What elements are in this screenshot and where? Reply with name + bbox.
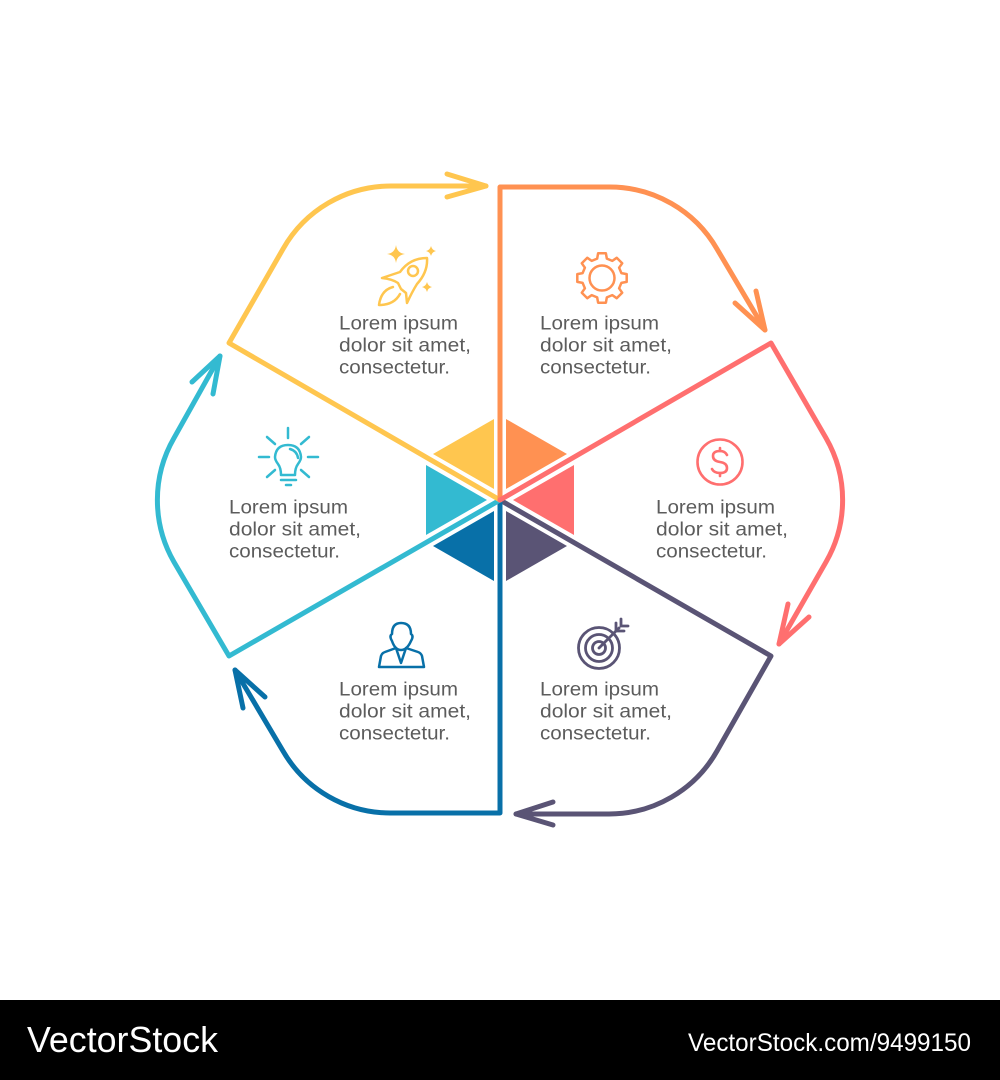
text block: right: dolor sit amet,	[656, 518, 788, 540]
central hexagon	[426, 419, 574, 581]
outline: yellow segment with arrow	[229, 174, 500, 500]
text block: top right: consectetur.	[540, 356, 651, 378]
footer url text: VectorStock.com/9499150	[688, 1029, 971, 1057]
hexagon segment: orange	[506, 419, 567, 489]
icon: person	[379, 623, 424, 667]
outline: coral segment with arrow	[500, 343, 843, 644]
hexagon segment: coral	[513, 465, 574, 535]
footer bar	[0, 1000, 1000, 1080]
hexagon segment: purple	[506, 511, 567, 581]
icon: gear	[577, 253, 627, 303]
icon: rocket	[379, 245, 436, 305]
text block: bottom left: dolor sit amet,	[339, 700, 471, 722]
text block: top left: consectetur.	[339, 356, 450, 378]
icon: light bulb	[259, 428, 318, 485]
text block: bottom right: consectetur.	[540, 722, 651, 744]
text block: bottom left: Lorem ipsum	[339, 678, 458, 700]
outline: orange segment with arrow	[500, 187, 765, 500]
hexagon segment: cyan	[426, 465, 487, 535]
text block: bottom left	[339, 678, 471, 744]
text block: left	[229, 496, 361, 562]
text block: right	[656, 496, 788, 562]
outline: blue segment with arrow	[235, 500, 500, 813]
icon: dollar coin	[698, 440, 742, 484]
text block: bottom right: Lorem ipsum	[540, 678, 659, 700]
text block: left: consectetur.	[229, 540, 340, 562]
text block: right: Lorem ipsum	[656, 496, 775, 518]
text block: bottom right: dolor sit amet,	[540, 700, 672, 722]
text block: top left: Lorem ipsum	[339, 312, 458, 334]
text block: top left: dolor sit amet,	[339, 334, 471, 356]
text block: right: consectetur.	[656, 540, 767, 562]
text block: top right	[540, 312, 672, 378]
text block: top right: dolor sit amet,	[540, 334, 672, 356]
outline: cyan segment with arrow	[157, 356, 500, 656]
text block: top right: Lorem ipsum	[540, 312, 659, 334]
footer logo text: VectorStock	[27, 1019, 219, 1060]
text block: bottom right	[540, 678, 672, 744]
hexagon segment: yellow	[433, 419, 494, 489]
icon: target with arrow	[578, 619, 628, 668]
text block: left: Lorem ipsum	[229, 496, 348, 518]
outline: purple segment with arrow	[500, 500, 771, 825]
text block: bottom left: consectetur.	[339, 722, 450, 744]
text block: top left	[339, 312, 471, 378]
hexagon segment: blue	[433, 511, 494, 581]
text block: left: dolor sit amet,	[229, 518, 361, 540]
